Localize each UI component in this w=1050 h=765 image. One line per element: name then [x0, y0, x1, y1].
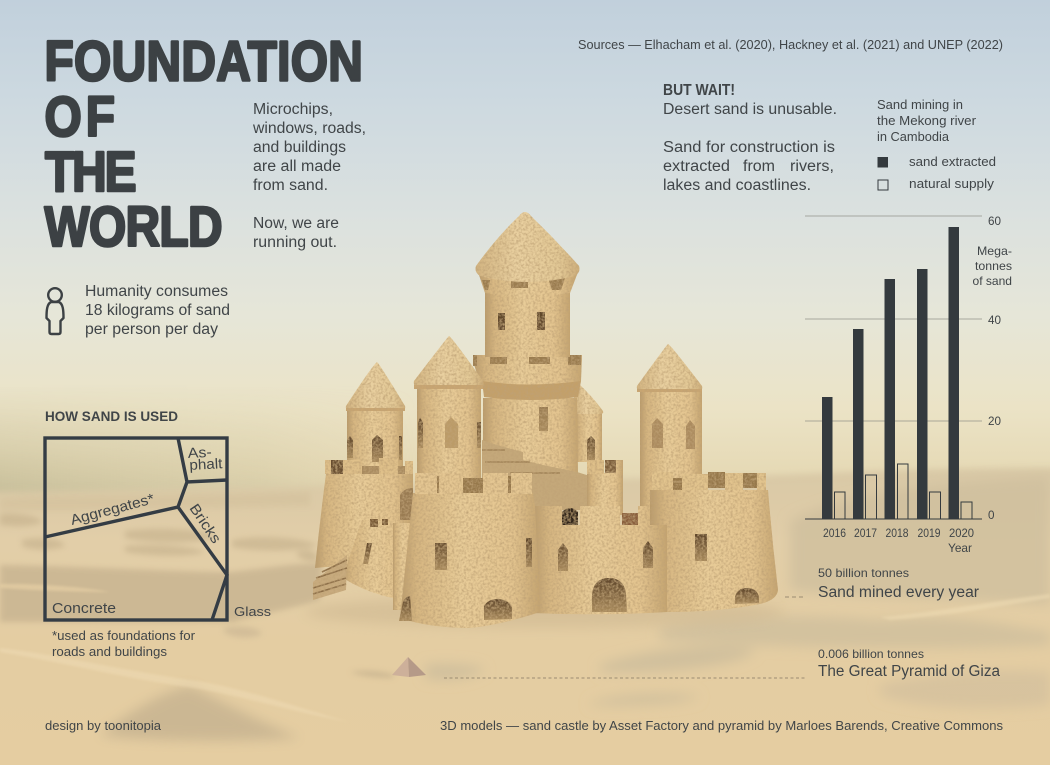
x axis labels: 2019: [918, 526, 941, 540]
but wait text: from: [743, 158, 775, 175]
per-person consumption text: per person per day: [85, 321, 218, 338]
sand castle: [313, 212, 778, 628]
y axis labels: 60: [988, 214, 1001, 228]
callout: great pyramid: [818, 647, 1000, 680]
left middle tower: [414, 336, 484, 480]
label: asphalt: As-: [187, 445, 212, 462]
label: bricks: Bricks: [186, 501, 224, 547]
y axis title: Mega-: [977, 244, 1012, 258]
treemap: how sand is used: [45, 438, 272, 620]
y axis title: of sand: [972, 274, 1012, 288]
bars: sand extracted: [822, 227, 959, 519]
y axis title: tonnes: [975, 259, 1012, 273]
background: desert dunes: [0, 468, 1050, 765]
central keep: [473, 212, 582, 475]
y axis title: [972, 244, 1012, 288]
pyramid of Giza: [392, 657, 426, 677]
label: asphalt: [187, 444, 223, 474]
intro text: from sand.: [253, 177, 328, 194]
y axis labels: 20: [988, 414, 1001, 428]
rear right wall: [587, 460, 623, 515]
x axis labels: Year: [948, 541, 972, 555]
title: OF: [44, 85, 115, 149]
bar chart: sand mining: [805, 214, 1012, 555]
per-person consumption text: Humanity consumes: [85, 283, 228, 300]
chart title: in Cambodia: [877, 129, 950, 144]
label: glass: Glass: [234, 604, 272, 619]
intro text: are all made: [253, 158, 341, 175]
left rear wall tower: [315, 458, 413, 568]
x axis labels: 2018: [886, 526, 909, 540]
background: sky: [0, 0, 1050, 510]
front left tower: [393, 473, 540, 628]
callout: great pyramid: 0.006 billion tonnes: [818, 647, 924, 661]
heading: how sand is used: HOW SAND IS USED: [45, 408, 178, 424]
callout: sand mined every year: [818, 566, 979, 601]
credit: designer: design by toonitopia: [45, 718, 162, 733]
but wait text: Desert sand is unusable.: [663, 101, 837, 118]
but wait text: BUT WAIT!: [663, 82, 735, 99]
intro text: and buildings: [253, 139, 346, 156]
title: THE: [45, 140, 137, 204]
label: concrete: Concrete: [52, 601, 116, 617]
right front tower: [650, 472, 778, 612]
left bastion and steps: [313, 519, 410, 600]
central stairs: [482, 440, 605, 510]
x axis labels: [823, 526, 974, 555]
bars: natural supply: [834, 464, 972, 519]
footnote: roads and buildings: [52, 644, 168, 659]
footnote: *used as foundations for: [52, 628, 196, 643]
legend: sand extracted: [909, 154, 996, 169]
x axis labels: 2016: [823, 526, 846, 540]
icon: person: [46, 288, 64, 334]
footnote: [52, 628, 196, 659]
intro text: Microchips,: [253, 101, 333, 118]
y axis labels: 0: [988, 508, 995, 522]
callout: sand mined every year: 50 billion tonnes: [818, 566, 909, 580]
back left tower: [346, 362, 405, 470]
intro text: windows, roads,: [252, 120, 366, 137]
chart title: the Mekong river: [877, 113, 977, 128]
right tower: [637, 344, 702, 510]
title: WORLD: [44, 195, 223, 259]
x axis labels: 2020: [949, 526, 974, 540]
callout: great pyramid: The Great Pyramid of Giza: [818, 663, 1000, 680]
title: [44, 30, 363, 259]
but wait text: lakes and coastlines.: [663, 177, 811, 194]
label: asphalt: phalt: [189, 456, 223, 474]
chart title: [877, 97, 977, 144]
callout: sand mined every year: Sand mined every year: [818, 584, 979, 601]
sources: Sources — Elhacham et al. (2020), Hackney et al. (2021) and UNEP (2022): [578, 37, 1003, 52]
y axis labels: 40: [988, 313, 1001, 327]
y axis labels: [988, 214, 1001, 522]
background: hazy horizon on left: [0, 413, 278, 494]
castle contact shadow: [305, 596, 785, 628]
guide line: pyramid: [444, 677, 805, 679]
but wait text: Sand for construction is: [663, 139, 835, 156]
intro text: Now, we are: [253, 215, 339, 232]
title: FOUNDATION: [44, 30, 363, 93]
central curtain wall: [533, 506, 667, 614]
credit: 3D models: 3D models — sand castle by Asset Factory and pyramid by Marloes Barends, Creative Commons: [440, 718, 1003, 733]
per-person consumption text: [85, 283, 230, 338]
chart title: Sand mining in: [877, 97, 963, 112]
but wait text: rivers,: [790, 158, 834, 175]
x axis labels: 2017: [854, 526, 877, 540]
label: aggregates: Aggregates*: [69, 491, 156, 529]
per-person consumption text: 18 kilograms of sand: [85, 302, 230, 319]
but wait text: [663, 82, 837, 194]
back right small tower: [574, 383, 603, 462]
but wait text: extracted: [663, 158, 730, 175]
intro text: [252, 101, 366, 251]
legend: natural supply: [909, 176, 995, 191]
intro text: running out.: [253, 234, 337, 251]
guide line: sand mined: [785, 596, 805, 598]
legend: [878, 154, 996, 191]
